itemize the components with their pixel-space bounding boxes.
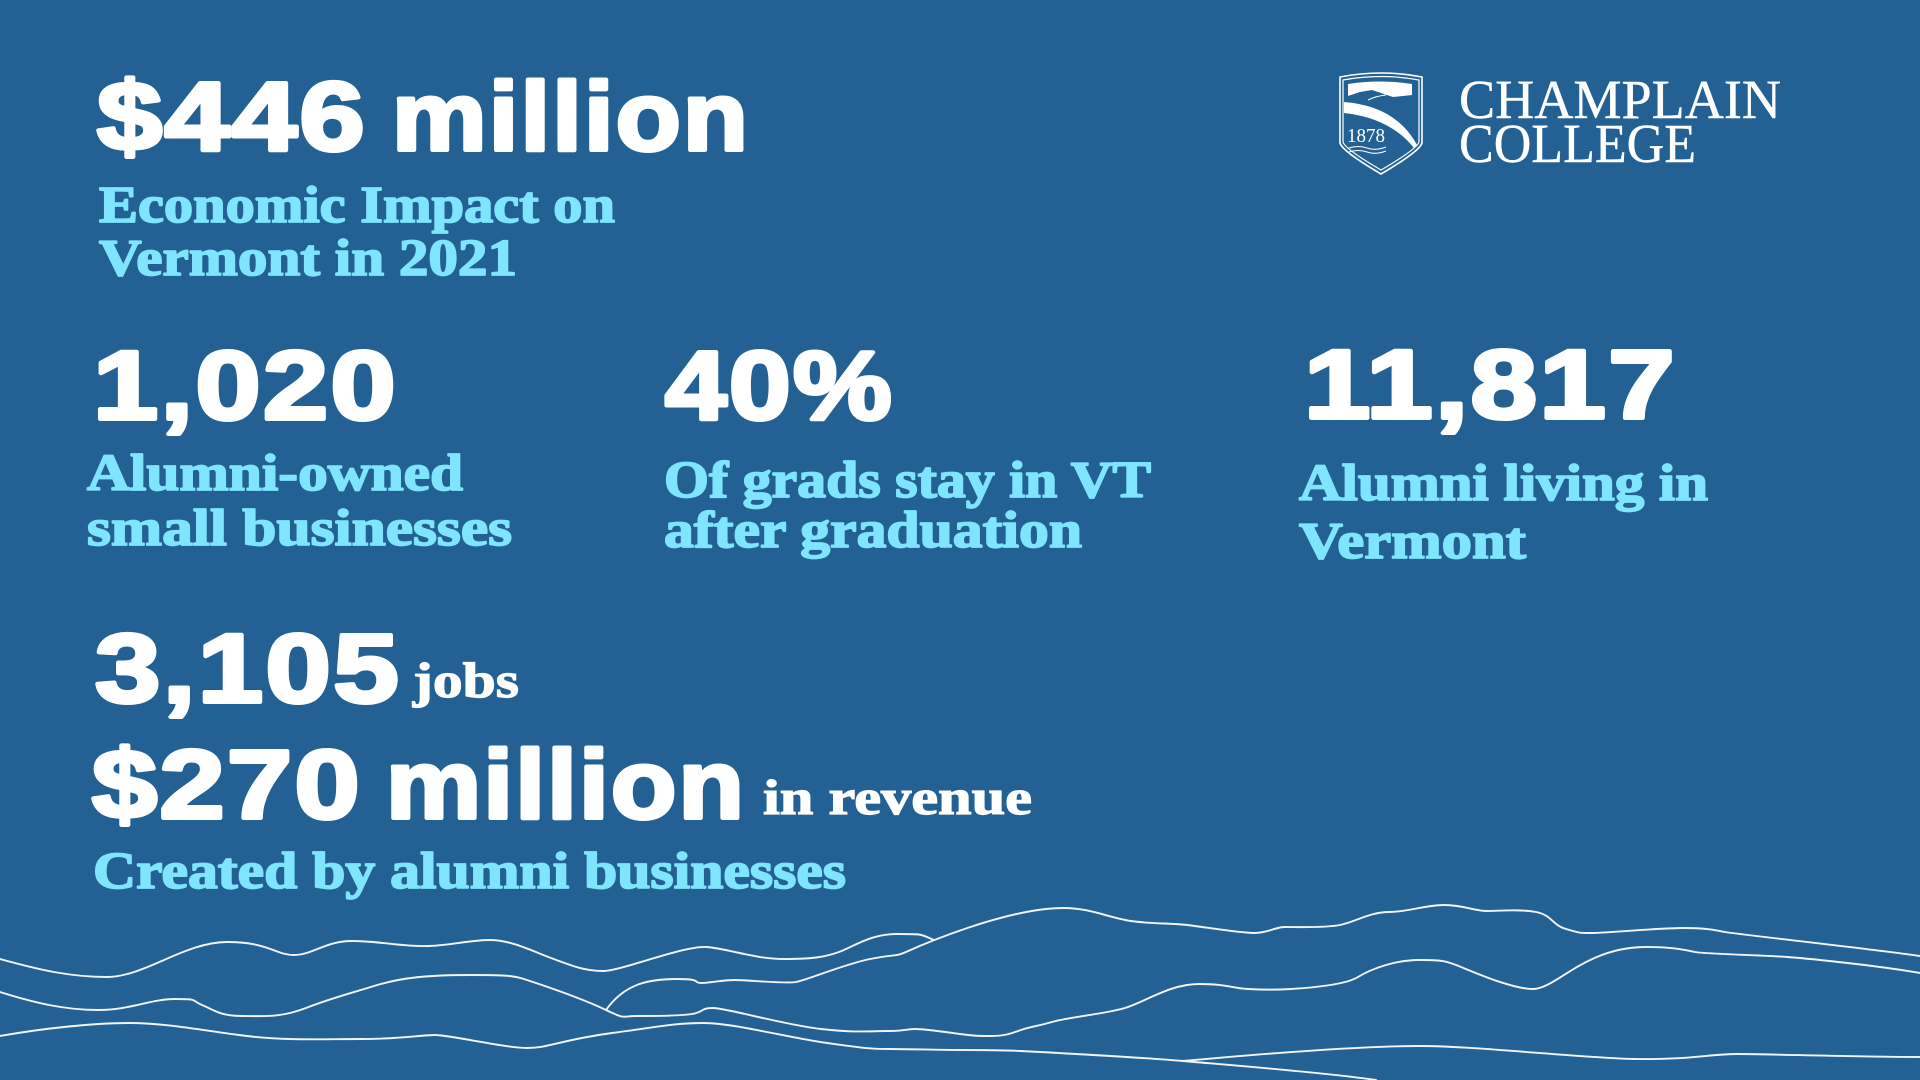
- panel: headline economic impact: [97, 62, 750, 287]
- stat number: 40%: [665, 331, 894, 440]
- revenue number: million: [386, 730, 746, 839]
- jobs number: 3,105: [95, 614, 401, 723]
- revenue label: in revenue: [763, 769, 1032, 825]
- stat description: Alumni living in: [1299, 455, 1708, 512]
- headline number: million: [392, 62, 750, 171]
- logo: Champlain College: [1340, 69, 1781, 174]
- stat description: small businesses: [87, 500, 512, 557]
- jobs and revenue description: Created by alumni businesses: [93, 843, 846, 900]
- headline description: Economic Impact on: [99, 177, 615, 234]
- revenue number: $270: [92, 730, 362, 839]
- headline description: [99, 177, 615, 287]
- panel: alumni-owned small businesses: [87, 331, 512, 557]
- panel: grads stay in Vermont: [664, 331, 1151, 559]
- stat description: [664, 452, 1151, 559]
- mountain line illustration: [0, 905, 1920, 1080]
- stat description: [87, 445, 512, 557]
- stat description: [1299, 455, 1708, 570]
- stat description: Vermont: [1299, 513, 1527, 570]
- stat number: 1,020: [93, 331, 398, 440]
- headline number: [97, 62, 750, 171]
- logo wordmark: CHAMPLAIN: [1459, 69, 1781, 130]
- panel: jobs and revenue from alumni businesses: [92, 614, 1032, 900]
- jobs label: jobs: [412, 652, 519, 708]
- headline number: $446: [97, 62, 367, 171]
- stat description: Of grads stay in VT: [664, 452, 1151, 509]
- stat number: 11,817: [1304, 330, 1677, 439]
- panel: alumni living in Vermont: [1299, 330, 1708, 570]
- icon: shield crest: [1340, 73, 1422, 174]
- logo wordmark: COLLEGE: [1459, 113, 1696, 174]
- icon: shield crest: 1878: [1347, 125, 1385, 147]
- logo wordmark: [1459, 69, 1781, 174]
- stat description: Alumni-owned: [87, 445, 463, 502]
- revenue number: [92, 730, 746, 839]
- stat description: after graduation: [664, 502, 1082, 559]
- headline description: Vermont in 2021: [99, 230, 517, 287]
